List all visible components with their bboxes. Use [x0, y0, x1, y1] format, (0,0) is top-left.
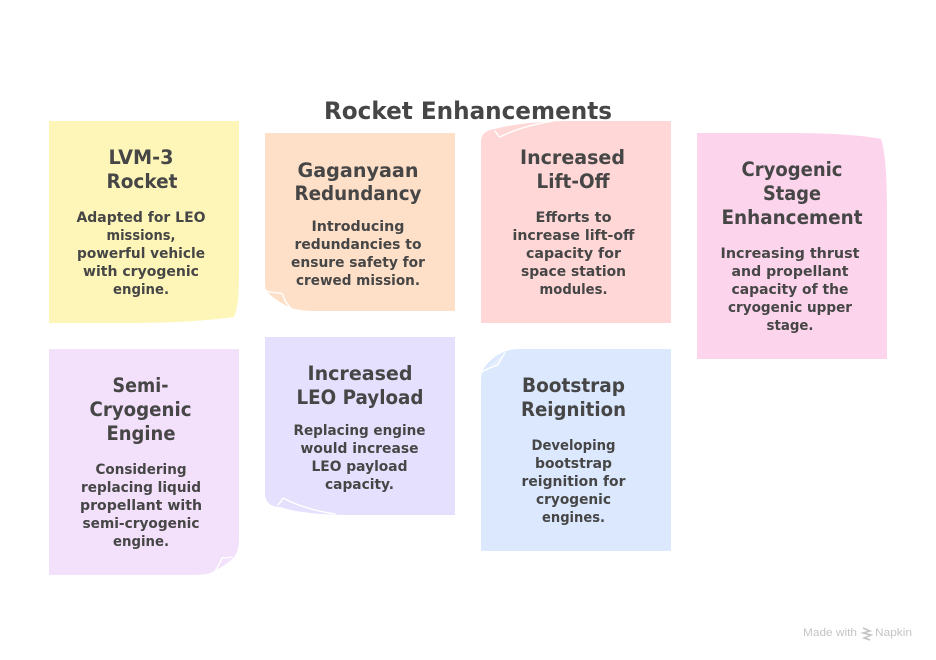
description: powerful vehicle [77, 246, 205, 262]
page fold [495, 121, 553, 137]
heading: LEO Payload [296, 386, 424, 409]
description: space station [521, 264, 626, 280]
description: replacing liquid [81, 480, 201, 496]
heading [722, 158, 862, 229]
description: cryogenic [536, 492, 611, 508]
description: Efforts to [536, 210, 612, 226]
description [76, 210, 206, 298]
panel: Increased Lift-Off [481, 121, 671, 323]
description: redundancies to [294, 237, 422, 253]
icon: Napkin logo [863, 628, 871, 640]
description: capacity. [325, 477, 394, 493]
heading: Increased [308, 362, 412, 385]
heading [520, 146, 625, 193]
panel: Increased LEO Payload [265, 337, 455, 515]
heading [521, 374, 626, 421]
description: Increasing thrust [720, 246, 860, 262]
description [512, 210, 635, 298]
panel: Gaganyaan Redundancy [265, 133, 455, 311]
heading: LVM-3 [108, 146, 174, 169]
heading [106, 146, 178, 193]
description: engines. [542, 510, 605, 526]
sticky note background [49, 121, 239, 323]
watermark: Made with Napkin: Made with [803, 627, 857, 639]
description: stage. [766, 318, 814, 334]
panel: Cryogenic Stage Enhancement [697, 133, 887, 359]
page fold [215, 557, 232, 571]
sticky note background [481, 121, 671, 323]
description: missions, [106, 228, 176, 244]
description: Considering [96, 462, 186, 478]
description: increase lift-off [512, 228, 635, 244]
heading: Cryogenic [742, 158, 842, 181]
heading: Engine [106, 422, 176, 445]
sticky note background [697, 133, 887, 359]
description: LEO payload [312, 459, 408, 475]
description: with cryogenic [83, 264, 199, 280]
description: ensure safety for [291, 255, 425, 271]
panel: Bootstrap Reignition [481, 349, 671, 551]
description: semi-cryogenic [82, 516, 200, 532]
description: capacity of the [732, 282, 848, 298]
page fold [278, 498, 335, 514]
heading: Reignition [521, 398, 626, 421]
heading: Cryogenic [90, 398, 192, 421]
heading: Gaganyaan [298, 159, 418, 182]
watermark: Made with Napkin: Napkin [875, 627, 912, 639]
description: and propellant [732, 264, 849, 280]
sticky note background [265, 133, 455, 311]
heading: Enhancement [722, 206, 862, 229]
description: Replacing engine [294, 423, 426, 439]
description: would increase [300, 441, 418, 457]
heading: Stage [763, 182, 821, 205]
panel: Semi-Cryogenic Engine [49, 349, 239, 575]
sticky note background [481, 349, 671, 551]
description: Introducing [312, 219, 404, 235]
heading [90, 374, 192, 445]
heading: Increased [520, 146, 625, 169]
description: Developing [532, 438, 616, 454]
description [720, 246, 860, 334]
description: propellant with [80, 498, 202, 514]
description [522, 438, 626, 526]
description: engine. [113, 534, 169, 550]
title: Rocket Enhancements [324, 97, 612, 125]
description: engine. [113, 282, 169, 298]
description: bootstrap [535, 456, 612, 472]
page fold [482, 353, 505, 372]
heading [296, 362, 424, 409]
description [294, 423, 426, 493]
heading: Bootstrap [522, 374, 625, 397]
description: modules. [540, 282, 608, 298]
description [80, 462, 202, 550]
description: crewed mission. [296, 273, 420, 289]
description: reignition for [522, 474, 626, 490]
panel: LVM-3 Rocket [49, 121, 239, 323]
heading: Lift-Off [536, 170, 610, 193]
heading: Semi- [112, 374, 168, 397]
sticky note background [49, 349, 239, 575]
page fold [267, 291, 290, 307]
heading: Rocket [106, 170, 178, 193]
description: cryogenic upper [728, 300, 852, 316]
heading: Redundancy [294, 182, 422, 205]
watermark: Made with Napkin [803, 627, 912, 640]
sticky note background [265, 337, 455, 515]
heading [294, 159, 422, 205]
description: capacity for [526, 246, 621, 262]
description: Adapted for LEO [76, 210, 206, 226]
description [291, 219, 425, 289]
